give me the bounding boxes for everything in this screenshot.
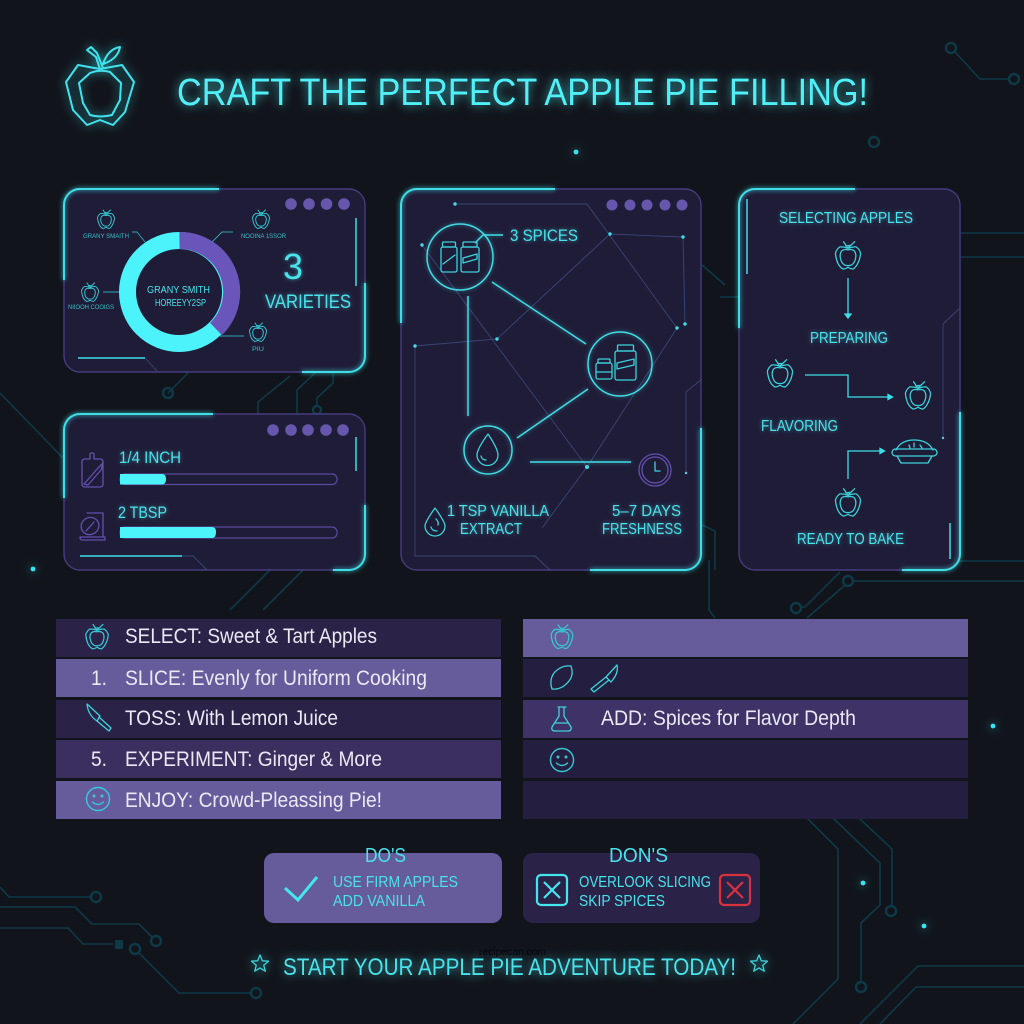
icon: clock xyxy=(639,454,671,486)
icon: jars node xyxy=(588,332,652,396)
row: enjoy xyxy=(56,781,501,819)
row: add spices xyxy=(523,700,968,738)
variety labels: GRANY SMAITH xyxy=(83,233,129,240)
row: select: SELECT: Sweet & Tart Apples xyxy=(125,625,377,648)
row: lemon and knife icons xyxy=(523,659,968,697)
step labels: PREPARING xyxy=(810,330,888,347)
stat: 3 varieties: VARIETIES xyxy=(265,292,351,313)
do's text xyxy=(333,874,458,910)
step labels xyxy=(761,210,913,548)
step labels: READY TO BAKE xyxy=(797,531,904,548)
don'ts text: OVERLOOK SLICING xyxy=(579,874,711,891)
title: CRAFT THE PERFECT APPLE PIE FILLING! xyxy=(177,72,868,114)
heading: don'ts: DON'S xyxy=(609,845,668,867)
icon: spice jars node xyxy=(427,224,493,290)
row: enjoy: ENJOY: Crowd-Pleassing Pie! xyxy=(125,789,382,812)
icon: small drop xyxy=(425,508,445,536)
row: smile icon xyxy=(523,740,968,778)
footer text: START YOUR APPLE PIE ADVENTURE TODAY! xyxy=(283,954,736,981)
panel: don'ts xyxy=(523,845,760,923)
icon: right star xyxy=(750,955,768,971)
row: experiment: 5. xyxy=(91,748,107,771)
watermark: recipecan.com xyxy=(479,947,546,958)
row: apple icon xyxy=(523,619,968,657)
list: left column xyxy=(56,619,501,819)
stat: 3 varieties xyxy=(265,246,351,313)
step labels: FLAVORING xyxy=(761,418,838,435)
icon: left star xyxy=(252,955,268,971)
row: experiment xyxy=(56,740,501,778)
label: 3 spices: 3 SPICES xyxy=(510,226,578,245)
heading: do's: DO'S xyxy=(365,845,406,867)
icons: flow apples xyxy=(767,242,931,516)
row: select xyxy=(56,619,501,657)
icon: check xyxy=(285,877,317,900)
label: freshness: 5–7 DAYS xyxy=(612,503,681,520)
footer call to action xyxy=(252,954,768,981)
variety labels xyxy=(68,233,286,353)
row: experiment: EXPERIMENT: Ginger & More xyxy=(125,748,382,771)
list: right column xyxy=(523,619,968,819)
row: toss xyxy=(56,700,501,738)
measure: 2 tbsp: 2 TBSP xyxy=(118,503,167,522)
donut centre label xyxy=(147,284,210,309)
icon: apple logo xyxy=(66,47,134,125)
do's text: USE FIRM APPLES xyxy=(333,874,458,891)
icon: red cross box xyxy=(720,875,750,905)
don'ts text xyxy=(579,874,711,910)
panel: process flow xyxy=(739,189,960,570)
icon: cutting board xyxy=(82,453,103,487)
icons: variety apples xyxy=(82,210,270,342)
do's text: ADD VANILLA xyxy=(333,893,425,910)
label: vanilla xyxy=(447,503,549,538)
variety leader lines xyxy=(103,232,244,336)
panel: do's xyxy=(264,845,502,923)
donut chart xyxy=(128,240,232,344)
measure: 1/4 inch: 1/4 INCH xyxy=(119,448,181,467)
label: vanilla: EXTRACT xyxy=(460,521,522,538)
row: slice: 1. xyxy=(91,667,107,690)
measure: 2 tbsp xyxy=(118,503,337,538)
row: toss: TOSS: With Lemon Juice xyxy=(125,707,338,730)
panel: measurements xyxy=(64,414,365,570)
row: empty xyxy=(523,781,968,819)
row: slice: SLICE: Evenly for Uniform Cooking xyxy=(125,667,427,690)
label: freshness xyxy=(602,503,682,538)
glowing dots xyxy=(31,150,995,928)
panel: spice network xyxy=(401,189,702,570)
don'ts text: SKIP SPICES xyxy=(579,893,665,910)
icon: vanilla drop node xyxy=(464,426,512,474)
variety labels: PIU xyxy=(252,346,264,353)
icon: pie xyxy=(892,440,937,463)
label: vanilla: 1 TSP VANILLA xyxy=(447,503,549,520)
icon: measuring scale xyxy=(78,513,105,540)
panel: apple varieties xyxy=(64,189,365,372)
stat: 3 varieties: 3 xyxy=(283,246,303,287)
donut centre label: GRANY SMITH xyxy=(147,284,210,296)
variety labels: NOOINA 1SSOR xyxy=(241,233,286,240)
row: slice xyxy=(56,659,501,697)
variety labels: NIIOOH COOIGS xyxy=(68,304,115,311)
step labels: SELECTING APPLES xyxy=(779,210,913,227)
label: freshness: FRESHNESS xyxy=(602,521,682,538)
row: add spices: ADD: Spices for Flavor Depth xyxy=(601,707,856,730)
measure: 1/4 inch xyxy=(119,448,337,484)
icon: cyan cross box xyxy=(537,875,567,905)
donut centre label: HOREEYY2SP xyxy=(155,297,206,309)
flow arrows xyxy=(805,278,892,479)
